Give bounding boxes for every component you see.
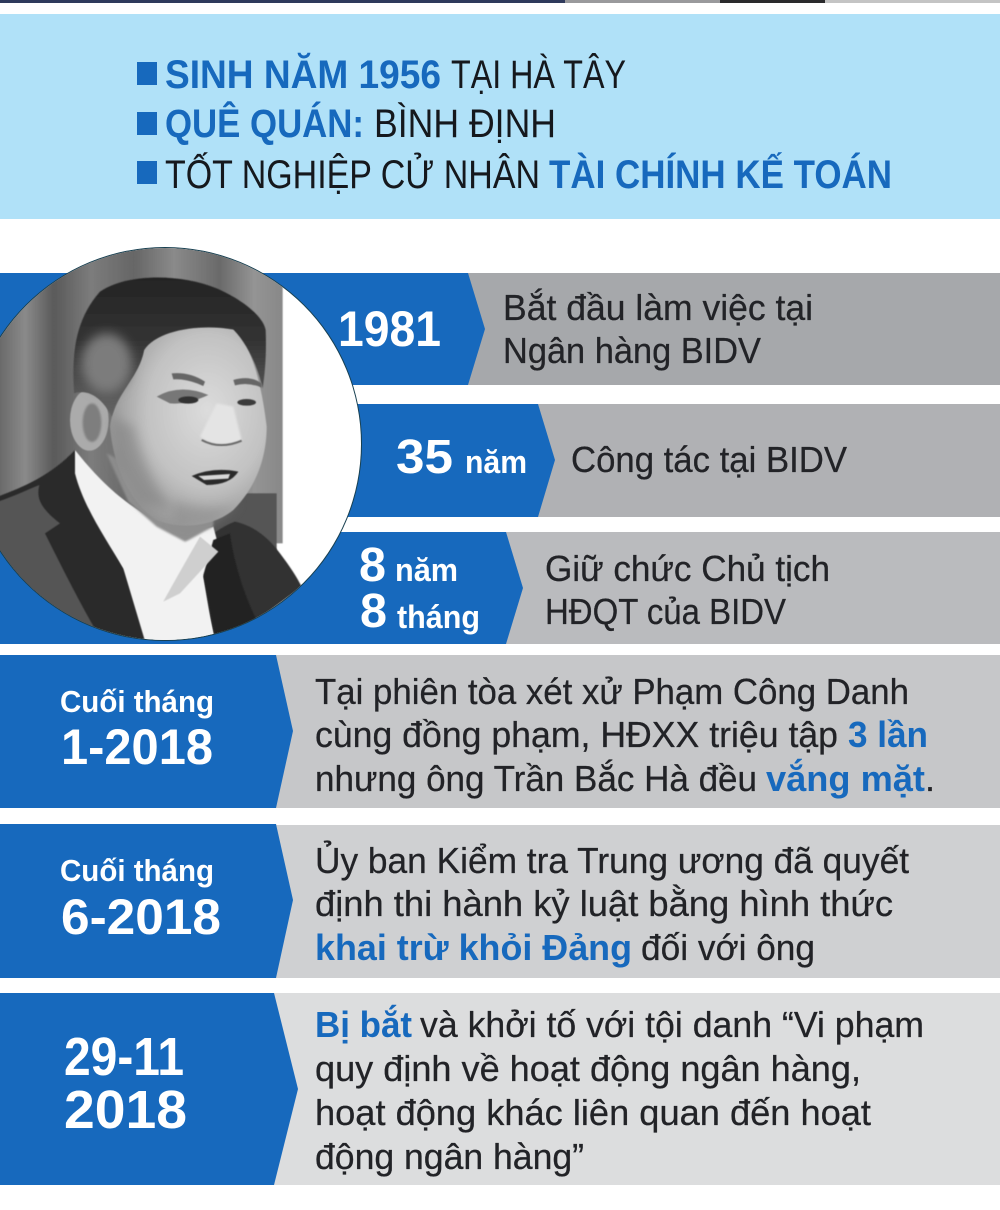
face [110, 327, 267, 526]
description: 29-11-2018: hoạt động khác liên quan đến hoạt [315, 1092, 871, 1133]
row: late June 2018 [0, 824, 1000, 978]
description: late June 2018: Ủy ban Kiểm tra Trung ương đã quyết [315, 839, 909, 881]
description: late January 2018: Tại phiên tòa xét xử Phạm Công Danh [315, 671, 909, 712]
description: late June 2018: đối với ông [641, 927, 815, 968]
description: late January 2018: 3 lần [848, 714, 928, 755]
hair [73, 277, 266, 417]
label: 8 years 8 months: năm [395, 552, 458, 588]
jacket right [202, 521, 302, 634]
description: late January 2018: vắng mặt [766, 757, 925, 799]
description: late June 2018 [315, 839, 909, 968]
description: 29-11-2018: quy định về hoạt động ngân hàng, [315, 1048, 861, 1089]
description: 35 years: Công tác tại BIDV [571, 439, 847, 480]
row: 35 years [0, 404, 1000, 517]
date: late June 2018: Cuối tháng [60, 853, 214, 888]
date: late January 2018 [60, 684, 214, 775]
description: late January 2018: . [925, 758, 935, 799]
row: 29-11-2018 [0, 993, 1000, 1185]
panel: personal information [0, 14, 1000, 219]
text: hometown: BÌNH ĐỊNH [374, 101, 556, 146]
text: birth: TẠI HÀ TÂY [451, 52, 626, 97]
description: 29-11-2018: Bị bắt [315, 1003, 412, 1045]
portrait photo [0, 237, 367, 647]
description: 29-11-2018: động ngân hàng” [315, 1136, 584, 1177]
date: late January 2018: Cuối tháng [60, 684, 214, 719]
date: 29-11-2018: 29-11 [64, 1027, 184, 1087]
date: late June 2018 [60, 853, 221, 945]
date: 29-11-2018 [64, 1027, 187, 1140]
text: hometown [165, 100, 556, 146]
text: birth: SINH NĂM 1956 [165, 52, 441, 97]
top image sliver [0, 0, 1000, 3]
label: 8 years 8 months: 8 [360, 585, 387, 638]
label: 1981: 1981 [338, 301, 441, 357]
shirt [75, 450, 220, 647]
text: birth [165, 52, 626, 97]
description: 8 years 8 months: Giữ chức Chủ tịch [545, 548, 830, 589]
date: late January 2018: 1-2018 [61, 719, 213, 775]
description: 1981: Bắt đầu làm việc tại [503, 287, 813, 328]
label: 8 years 8 months: tháng [397, 599, 480, 635]
label: 8 years 8 months [359, 539, 480, 638]
bullet: education [137, 161, 157, 184]
date: late June 2018: 6-2018 [61, 889, 221, 945]
text: education: TÀI CHÍNH KẾ TOÁN [549, 151, 892, 197]
label: 35 years: 35 [396, 431, 453, 484]
description: late June 2018: định thi hành kỷ luật bằng hình thức [315, 883, 893, 924]
features [157, 390, 208, 404]
description: 1981 [503, 287, 813, 371]
label: 8 years 8 months: 8 [359, 539, 386, 592]
description: late January 2018: cùng đồng phạm, HĐXX triệu tập [315, 714, 838, 755]
description: late January 2018: nhưng ông Trần Bắc Hà đều [315, 758, 757, 799]
description: 29-11-2018 [315, 1003, 924, 1177]
bullet: birth [137, 62, 157, 85]
date: 29-11-2018: 2018 [64, 1080, 187, 1140]
bullet: hometown [137, 112, 157, 135]
row: 8 years 8 months [0, 532, 1000, 644]
text: education [165, 151, 892, 197]
description: 1981: Ngân hàng BIDV [503, 330, 761, 371]
text: hometown: QUÊ QUÁN: [165, 100, 364, 146]
description: late June 2018: khai trừ khỏi Đảng [315, 927, 632, 968]
neck [107, 453, 213, 542]
description: late January 2018 [315, 671, 935, 799]
ear [70, 389, 109, 451]
row: late January 2018 [0, 655, 1000, 808]
jacket left [0, 450, 148, 647]
label: 35 years: năm [465, 444, 527, 480]
description: 8 years 8 months: HĐQT của BIDV [545, 591, 786, 632]
description: 29-11-2018: và khởi tố với tội danh “Vi phạm [420, 1004, 924, 1045]
text: education: TỐT NGHIỆP CỬ NHÂN [165, 151, 540, 197]
description: 8 years 8 months [545, 548, 830, 632]
row: 1981 [0, 273, 1000, 385]
label: 35 years [396, 431, 527, 484]
